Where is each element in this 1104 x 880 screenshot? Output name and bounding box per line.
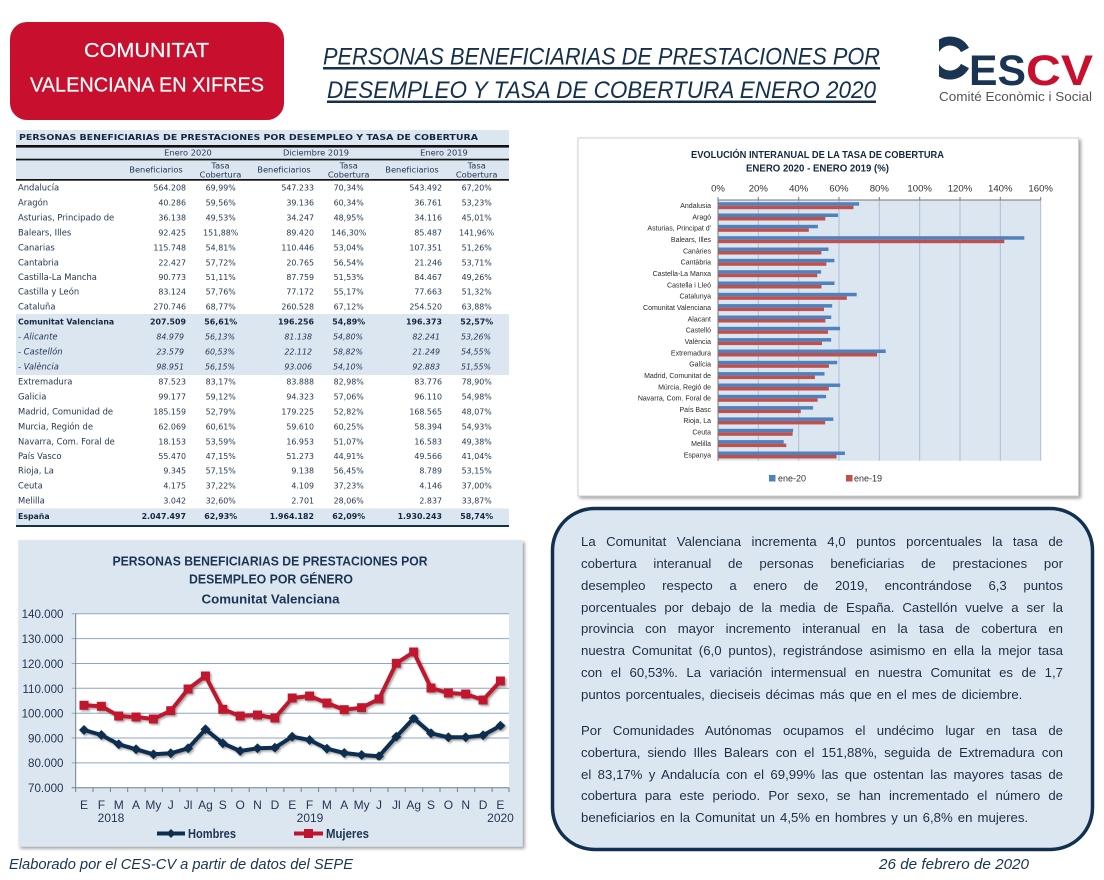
paragraph 2: cobertura para este periodo. Por sexo, se han incrementado el número de — [581, 788, 1063, 803]
x axis labels: M — [114, 798, 124, 812]
table rows: 51.273 — [286, 452, 314, 461]
table rows: 55.470 — [158, 452, 186, 461]
bar chart legend: ene-20 — [778, 474, 806, 484]
table rows: 62.069 — [158, 422, 186, 432]
table rows: 57,72% — [206, 258, 236, 268]
x axis labels: F — [306, 798, 313, 812]
table rows: 84.979 — [156, 332, 184, 342]
table rows: 87.759 — [286, 273, 314, 282]
x axis labels: Jl — [184, 798, 192, 812]
paragraph 2: beneficiarios en la Comunitat un 4,5% en hombres y un 6,8% en mujeres. — [581, 810, 1028, 825]
table rows: 22.112 — [284, 348, 312, 356]
footer date: 26 de febrero de 2020 — [878, 856, 1030, 873]
table rows: 40.286 — [158, 198, 186, 208]
x axis labels: Jl — [392, 798, 401, 812]
bar chart category labels: Extremadura — [671, 350, 711, 357]
table rows: España — [18, 512, 50, 521]
table rows: 52,82% — [334, 408, 364, 416]
table rows: 53,26% — [461, 332, 491, 342]
table column headers: Cobertura — [456, 170, 498, 180]
table rows: 4.175 — [163, 482, 186, 490]
table rows: Balears, Illes — [18, 228, 71, 238]
table rows: 60,34% — [334, 198, 364, 208]
table rows: 1.964.182 — [270, 512, 314, 521]
table rows: 34.247 — [286, 214, 314, 222]
table rows: 37,22% — [206, 482, 236, 490]
table rows: 56,15% — [205, 362, 235, 372]
bar chart category labels: Comunitat Valenciana — [643, 305, 711, 312]
x axis labels: A — [340, 798, 348, 812]
table rows: 4.109 — [291, 482, 314, 490]
table rows: - Castellón — [18, 346, 63, 356]
paragraph 1: La Comunitat Valenciana incrementa 4,0 puntos porcentuales la tasa de — [581, 534, 1063, 549]
table rows: 2.837 — [419, 496, 442, 506]
paragraph 1: con el 60,53%. La variación intermensual en nuestra Comunitat es de 1,7 — [581, 665, 1063, 680]
table rows: 57,15% — [206, 466, 236, 476]
table rows: 62,09% — [332, 512, 365, 521]
table rows: 185.159 — [153, 408, 186, 416]
table rows: 49,38% — [462, 438, 492, 446]
table rows: 20.765 — [286, 258, 314, 268]
table rows: Castilla y León — [18, 286, 79, 296]
table rows: 2.047.497 — [142, 512, 186, 521]
table rows: 60,25% — [334, 422, 364, 432]
bar chart category labels: Catalunya — [679, 294, 711, 301]
table rows: 51,26% — [462, 244, 492, 252]
table rows: 48,07% — [462, 408, 492, 416]
paragraph 1: provincia con mayor incremento interanual en la tasa de cobertura en — [581, 621, 1063, 636]
table rows: Aragón — [18, 198, 48, 208]
table rows: 16.583 — [414, 438, 442, 446]
table rows: 36.761 — [414, 198, 442, 208]
table rows: 51,53% — [334, 273, 364, 282]
table rows: Andalucía — [18, 182, 59, 192]
bar chart category labels: Castelló — [686, 328, 711, 335]
bar chart category labels: Espanya — [684, 452, 711, 459]
table rows: 564.208 — [153, 184, 186, 192]
bar chart legend: ene-19 — [854, 474, 882, 484]
bar chart axis labels — [711, 184, 1053, 194]
table rows: 254.520 — [409, 302, 442, 312]
x axis labels: E — [496, 798, 504, 812]
table rows: - València — [18, 362, 59, 372]
line: Mujeres — [84, 652, 500, 719]
table rows: 547.233 — [281, 184, 314, 192]
table rows: Canarias — [18, 242, 55, 252]
table rows: 77.663 — [414, 288, 442, 296]
table rows: 1.930.243 — [398, 512, 442, 521]
bar chart category labels — [638, 203, 711, 459]
y axis labels: 80.000 — [28, 757, 64, 770]
x axis labels: N — [253, 798, 262, 812]
x axis labels: E — [288, 798, 296, 812]
table rows: 62,93% — [204, 512, 237, 521]
table rows: 44,91% — [334, 452, 364, 461]
table rows: 51,11% — [206, 273, 236, 282]
table rows — [18, 182, 495, 521]
table rows: Madrid, Comunidad de — [18, 406, 113, 416]
table rows: 77.172 — [286, 288, 314, 296]
line chart legend: Mujeres — [326, 827, 369, 841]
table rows: 54,89% — [332, 318, 365, 326]
x axis labels: O — [236, 798, 245, 812]
y axis labels: 90.000 — [28, 732, 64, 746]
line: Hombres — [84, 718, 500, 756]
line chart legend — [157, 827, 369, 841]
x axis labels: N — [461, 798, 470, 812]
panel: commentary text — [552, 508, 1092, 850]
table rows: 48,95% — [334, 214, 364, 222]
footer source: Elaborado por el CES-CV a partir de datos del SEPE — [9, 856, 354, 873]
table rows: Murcia, Región de — [18, 422, 93, 432]
paragraph 2: cobertura, siendo Illes Balears con el 151,88%, seguida de Extremadura con — [581, 745, 1063, 760]
table rows: 87.523 — [158, 378, 186, 386]
table rows: 179.225 — [281, 408, 314, 416]
table rows: 78,90% — [462, 378, 492, 386]
table rows: 94.323 — [286, 392, 314, 402]
bar chart category labels: Cantàbria — [681, 260, 711, 267]
y axis labels: 120.000 — [22, 658, 64, 671]
table rows: 52,79% — [206, 408, 236, 416]
bar chart axis labels: 40% — [789, 184, 809, 194]
logo: CES-CV: Comité Econòmic i Social — [939, 90, 1092, 104]
table rows: 83.124 — [158, 288, 186, 296]
table rows: 37,23% — [334, 482, 364, 490]
bar chart category labels: Andalusia — [680, 203, 711, 210]
table rows: 56,61% — [204, 318, 237, 326]
bar chart axis labels: 80% — [870, 184, 889, 194]
table rows: 22.427 — [158, 258, 186, 268]
table column headers: Beneficiarios — [385, 164, 439, 174]
table rows: 81.138 — [284, 332, 312, 342]
bar chart category labels: Navarra, Com. Foral de — [638, 396, 711, 403]
bar chart title: EVOLUCIÓN INTERANUAL DE LA TASA DE COBERTURA — [691, 149, 944, 161]
table rows: 60,53% — [205, 348, 235, 356]
table rows: 49.566 — [414, 452, 442, 461]
table rows: 89.420 — [286, 228, 314, 238]
table rows: 82,98% — [334, 378, 364, 386]
header badge: Comunitat Valenciana en xifres: VALENCIANA EN XIFRES — [30, 74, 264, 96]
table rows: 54,55% — [461, 348, 491, 356]
table rows: 196.256 — [278, 318, 314, 326]
x axis labels: My — [145, 798, 161, 812]
bar chart legend — [769, 474, 882, 484]
table rows: Rioja, La — [18, 466, 54, 476]
y axis labels: 70.000 — [28, 782, 64, 795]
x axis labels: S — [427, 798, 435, 812]
y axis labels: 130.000 — [22, 633, 64, 646]
bar chart title — [691, 149, 944, 174]
bar chart category labels: Galícia — [689, 362, 711, 369]
table rows: 54,10% — [333, 362, 363, 372]
table rows: 8.789 — [419, 466, 442, 476]
table rows: Galicia — [18, 392, 46, 402]
x axis labels: D — [271, 798, 280, 812]
table rows: 68,77% — [206, 302, 236, 312]
table rows: 2.701 — [291, 496, 314, 506]
table rows: Cantabria — [18, 258, 59, 268]
y axis labels — [22, 608, 64, 795]
table rows: 52,57% — [460, 318, 493, 326]
table rows: Castilla-La Mancha — [18, 272, 97, 282]
table rows: 53,71% — [462, 258, 492, 268]
bar chart title: ENERO 2020 - ENERO 2019 (%) — [746, 164, 889, 174]
bar chart category labels: Canàries — [683, 248, 711, 255]
x axis labels: E — [80, 798, 88, 812]
table rows: 53,59% — [206, 438, 236, 446]
table rows: 47,15% — [206, 452, 236, 461]
table rows: 58,74% — [460, 512, 493, 521]
table rows: Asturias, Principado de — [18, 212, 114, 222]
panel: line chart por género — [18, 540, 523, 847]
table rows: 85.487 — [414, 228, 442, 238]
table column headers: Enero 2019 — [420, 148, 468, 158]
table rows: 260.528 — [281, 302, 314, 312]
x axis labels: A — [132, 798, 140, 812]
table rows: 56,54% — [334, 258, 364, 268]
table rows: 34.116 — [414, 214, 442, 222]
line chart title — [112, 554, 428, 606]
table rows: 83.888 — [286, 378, 314, 386]
table rows: 151,88% — [203, 228, 239, 238]
table rows: 49,53% — [206, 214, 236, 222]
x axis labels: S — [219, 798, 227, 812]
table rows: 54,80% — [333, 332, 363, 342]
table rows: 58,82% — [333, 348, 363, 356]
table rows: Melilla — [18, 496, 45, 506]
paragraph 2: Por Comunidades Autónomas ocupamos el undécimo lugar en tasa de — [581, 723, 1063, 738]
table rows: País Vasco — [18, 451, 61, 461]
table rows: 92.425 — [158, 228, 186, 238]
table rows: 146,30% — [331, 228, 367, 238]
line chart legend: Hombres — [188, 827, 236, 841]
title: PERSONAS BENEFICIARIAS DE PRESTACIONES POR — [323, 44, 880, 70]
x axis labels: J — [376, 798, 382, 812]
panel: bar chart evolución interanual de la tasa de cobertura — [578, 138, 1078, 496]
table rows: 90.773 — [158, 273, 186, 282]
table rows: Navarra, Com. Foral de — [18, 436, 115, 446]
paragraph 1: nuestra Comunitat (6,0 puntos), registrándose asimismo en ella la mejor tasa — [581, 643, 1063, 658]
paragraph 2: el 83,17% y Andalucía con el 69,99% las que ostentan las mayores tasas de — [581, 767, 1063, 782]
table rows: 67,20% — [462, 184, 492, 192]
table rows: 69,99% — [206, 184, 236, 192]
table column headers: Beneficiarios — [257, 164, 311, 174]
y axis labels: 100.000 — [22, 708, 64, 720]
y axis labels: 140.000 — [22, 608, 64, 621]
table rows: 56,13% — [205, 332, 235, 342]
bars ene-19 — [718, 206, 1004, 458]
logo: CES-CV: CV — [1026, 47, 1093, 95]
bar chart axis labels: 100% — [907, 184, 932, 194]
table rows: 51,07% — [334, 438, 364, 446]
bar chart axis labels: 60% — [829, 184, 849, 194]
table rows: 51,55% — [461, 362, 491, 372]
table rows: 59,56% — [206, 198, 236, 208]
table rows: 99.177 — [158, 392, 186, 402]
bar chart axis labels: 0% — [711, 184, 725, 194]
table column headers: Enero 2020 — [164, 148, 212, 158]
bar chart category labels: Balears, Illes — [671, 237, 711, 244]
table rows: 28,06% — [334, 496, 364, 506]
bar chart category labels: Madrid, Comunitat de — [644, 373, 711, 380]
paragraph 2 — [581, 721, 1064, 836]
table rows: 45,01% — [462, 214, 492, 222]
table rows: 56,45% — [334, 466, 364, 476]
table rows: 63,88% — [462, 302, 492, 312]
table rows: 36.138 — [158, 214, 186, 222]
x axis labels: F — [98, 798, 105, 812]
table rows: Comunitat Valenciana — [18, 318, 114, 326]
table rows: 82.241 — [412, 332, 440, 342]
table rows: 543.492 — [409, 184, 442, 192]
header badge: Comunitat Valenciana en xifres: COMUNITAT — [84, 39, 209, 62]
x axis labels: My — [354, 798, 370, 812]
table rows: 70,34% — [334, 184, 364, 192]
table rows: 41,04% — [462, 452, 492, 461]
bar chart category labels: Melilla — [691, 441, 711, 448]
table rows: 60,61% — [206, 422, 236, 432]
header badge: Comunitat Valenciana en xifres — [10, 22, 284, 120]
table rows: 9.345 — [163, 466, 186, 476]
x axis labels: 2018 — [98, 811, 125, 825]
table rows: 9.138 — [291, 466, 314, 476]
table rows: 53,04% — [334, 244, 364, 252]
table column headers: Cobertura — [328, 170, 370, 180]
table rows: 58.394 — [414, 422, 442, 432]
x axis labels: 2020 — [487, 811, 514, 825]
x axis labels — [80, 798, 514, 825]
table rows: 33,87% — [462, 496, 492, 506]
table rows: 53,23% — [462, 198, 492, 208]
table rows: 93.006 — [284, 362, 312, 372]
title: DESEMPLEO Y TASA DE COBERTURA ENERO 2020 — [327, 77, 877, 104]
line chart title: PERSONAS BENEFICIARIAS DE PRESTACIONES POR — [112, 554, 428, 568]
table rows: 54,81% — [206, 244, 236, 252]
table rows: 39.136 — [286, 198, 314, 208]
logo: CES-CV — [933, 41, 1093, 104]
bar chart axis labels: 20% — [749, 184, 768, 194]
bar chart category labels: Rioja, La — [683, 418, 711, 425]
x axis labels: J — [168, 798, 174, 812]
table rows: 168.565 — [409, 408, 442, 416]
table rows: 110.446 — [281, 244, 314, 252]
table rows: 67,12% — [334, 302, 364, 312]
x axis labels: M — [322, 798, 332, 812]
table column headers: Tasa — [339, 160, 358, 170]
bar chart axis labels: 160% — [1028, 184, 1053, 194]
table rows: 21.246 — [414, 258, 442, 268]
table rows: 57,06% — [334, 392, 364, 402]
table column headers: Beneficiarios — [129, 164, 183, 174]
table rows: - Alicante — [18, 332, 58, 342]
table rows: 107.351 — [409, 244, 442, 252]
table: beneficiarios y tasa de cobertura — [16, 130, 509, 527]
line chart title: Comunitat Valenciana — [202, 592, 341, 606]
y axis labels: 110.000 — [22, 683, 64, 696]
bar chart axis labels: 120% — [948, 184, 973, 194]
bars ene-20 — [718, 202, 1024, 455]
table rows: 49,26% — [462, 273, 492, 282]
table rows: 54,93% — [462, 422, 492, 432]
logo: CES-CV: ES — [969, 47, 1026, 95]
table rows: 32,60% — [206, 496, 236, 506]
bar chart category labels: Castella-La Manxa — [653, 271, 711, 278]
table rows: Ceuta — [18, 480, 43, 490]
x axis labels: Ag — [198, 798, 213, 812]
table rows: 18.153 — [158, 438, 186, 446]
x axis labels: D — [479, 798, 488, 812]
table rows: 270.746 — [153, 302, 186, 312]
table rows: 51,32% — [462, 288, 492, 296]
x axis labels: Ag — [406, 798, 421, 812]
table rows: 23.579 — [156, 348, 184, 356]
table rows: Cataluña — [18, 302, 55, 312]
table column headers: Cobertura — [200, 170, 241, 180]
x axis labels: 2019 — [297, 811, 324, 825]
paragraph 1: cobertura interanual de personas beneficiarias de prestaciones por — [581, 556, 1063, 571]
bar chart category labels: Asturias, Principat d' — [647, 226, 711, 233]
table rows: Extremadura — [18, 376, 72, 386]
paragraph 1 — [581, 532, 1064, 712]
table rows: 98.951 — [156, 362, 184, 372]
bar chart category labels: València — [685, 339, 711, 346]
table rows: 4.146 — [419, 482, 442, 490]
table rows: 141,96% — [459, 228, 495, 238]
table rows: 16.953 — [286, 438, 314, 446]
table rows: 21.249 — [412, 348, 440, 356]
paragraph 1: porcentuales por debajo de la media de España. Castellón vuelve a ser la — [581, 600, 1063, 615]
bar chart category labels: Castella i Lleó — [667, 282, 711, 289]
bar chart category labels: Múrcia, Regió de — [658, 384, 711, 391]
table column headers — [129, 148, 498, 180]
table rows: 57,76% — [206, 288, 236, 296]
table rows: 196.373 — [406, 318, 442, 326]
bar chart category labels: País Basc — [679, 407, 711, 414]
title — [323, 44, 880, 104]
table column headers: Tasa — [210, 160, 230, 170]
table column headers: Diciembre 2019 — [283, 148, 349, 158]
table rows: 59,12% — [206, 392, 236, 402]
table rows: 96.110 — [414, 392, 442, 402]
line chart title: DESEMPLEO POR GÉNERO — [189, 572, 353, 586]
table rows: 84.467 — [414, 273, 442, 282]
table rows: 54,98% — [462, 392, 492, 402]
paragraph 1: puntos porcentuales, dieciseis décimas más que en el mes de diciembre. — [581, 687, 1022, 702]
bar chart category labels: Aragó — [692, 214, 711, 221]
table rows: 53,15% — [462, 466, 492, 476]
table column headers: Tasa — [467, 160, 486, 170]
table rows: 3.042 — [163, 496, 186, 506]
table rows: 207.509 — [150, 318, 186, 326]
table rows: 92.883 — [412, 362, 440, 372]
table rows: 83.776 — [414, 378, 442, 386]
x axis labels: O — [444, 798, 453, 812]
bar chart category labels: Ceuta — [692, 430, 711, 437]
table title: PERSONAS BENEFICIARIAS DE PRESTACIONES POR DESEMPLEO Y TASA DE COBERTURA — [19, 132, 479, 142]
paragraph 1: desempleo respecto a enero de 2019, encontrándose 6,3 puntos — [581, 578, 1063, 593]
table rows: 83,17% — [206, 378, 236, 386]
table rows: 37,00% — [462, 482, 492, 490]
bar chart category labels: Alacant — [688, 316, 711, 323]
table rows: 115.748 — [153, 244, 186, 252]
table rows: 55,17% — [334, 288, 364, 296]
table rows: 59.610 — [286, 422, 314, 432]
bar chart axis labels: 140% — [988, 184, 1013, 194]
